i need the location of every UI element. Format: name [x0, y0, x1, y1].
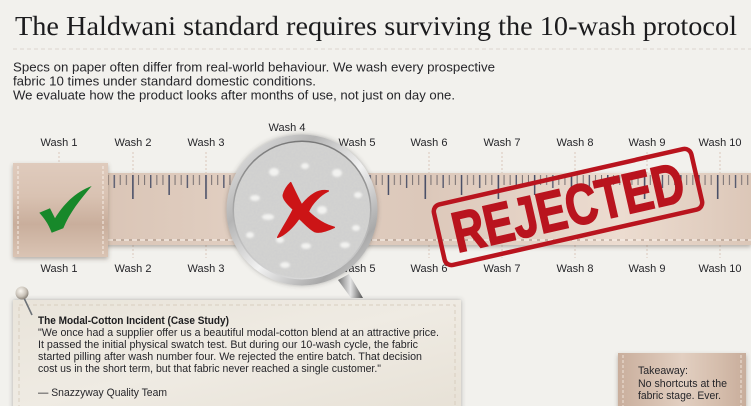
top wash labels: Wash 5	[339, 137, 375, 149]
rejected stamp: REJECTED	[446, 151, 690, 265]
top wash labels: Wash 8	[557, 137, 593, 149]
case study quote: It passed the initial physical swatch test. But during our 10-wash cycle, the fabric	[38, 339, 418, 351]
intro text: We evaluate how the product looks after months of use, not just on day one.	[13, 88, 455, 102]
panel: case study note	[13, 300, 461, 406]
bottom wash labels: Wash 3	[188, 263, 224, 275]
top wash labels: Wash 4	[269, 122, 305, 134]
icon: green check mark	[39, 186, 92, 233]
top wash labels: Wash 10	[698, 137, 742, 149]
case study quote: "We once had a supplier offer us a beautiful modal-cotton blend at an attractive price.	[38, 327, 439, 339]
top wash labels: Wash 9	[629, 137, 665, 149]
bottom wash labels: Wash 2	[115, 263, 151, 275]
top wash labels: Wash 3	[188, 137, 224, 149]
case study quote: cost us in the short term, but that fabric never reached a single customer."	[38, 363, 381, 375]
title: The Haldwani standard requires surviving the 10-wash protocol	[15, 11, 737, 41]
top wash labels: Wash 1	[41, 137, 77, 149]
icon: red cross	[278, 183, 334, 237]
takeaway text: fabric stage. Ever.	[638, 390, 721, 402]
handle	[338, 274, 363, 298]
takeaway tag	[618, 353, 746, 406]
takeaway text: Takeaway:	[638, 365, 688, 377]
bottom wash labels	[41, 263, 742, 275]
case study heading: The Modal-Cotton Incident (Case Study)	[38, 315, 229, 327]
top wash labels: Wash 7	[484, 137, 520, 149]
intro text	[13, 60, 495, 102]
intro text: fabric 10 times under standard domestic conditions.	[13, 74, 316, 88]
top wash labels: Wash 6	[411, 137, 447, 149]
intro text: Specs on paper often differ from real-world behaviour. We wash every prospective	[13, 60, 495, 74]
attribution: — Snazzyway Quality Team	[38, 387, 167, 399]
bottom wash labels: Wash 10	[698, 263, 742, 275]
passed patch: wash 1	[13, 163, 108, 257]
bottom wash labels: Wash 8	[557, 263, 593, 275]
bottom wash labels: Wash 5	[339, 263, 375, 275]
top wash labels	[41, 122, 742, 149]
case study quote: started pilling after wash number four. We rejected the entire batch. That decision	[38, 351, 422, 363]
lens with pilled fabric	[234, 142, 370, 268]
magnifying glass	[226, 134, 378, 298]
bottom wash labels: Wash 6	[411, 263, 447, 275]
bottom wash labels: Wash 1	[41, 263, 77, 275]
bottom wash labels: Wash 9	[629, 263, 665, 275]
case study quote	[38, 327, 439, 375]
top wash labels: Wash 2	[115, 137, 151, 149]
takeaway text	[638, 365, 727, 402]
bottom wash labels: Wash 7	[484, 263, 520, 275]
measuring tape belt	[100, 173, 751, 245]
takeaway text: No shortcuts at the	[638, 378, 727, 390]
icon: pearl pin	[16, 286, 32, 315]
